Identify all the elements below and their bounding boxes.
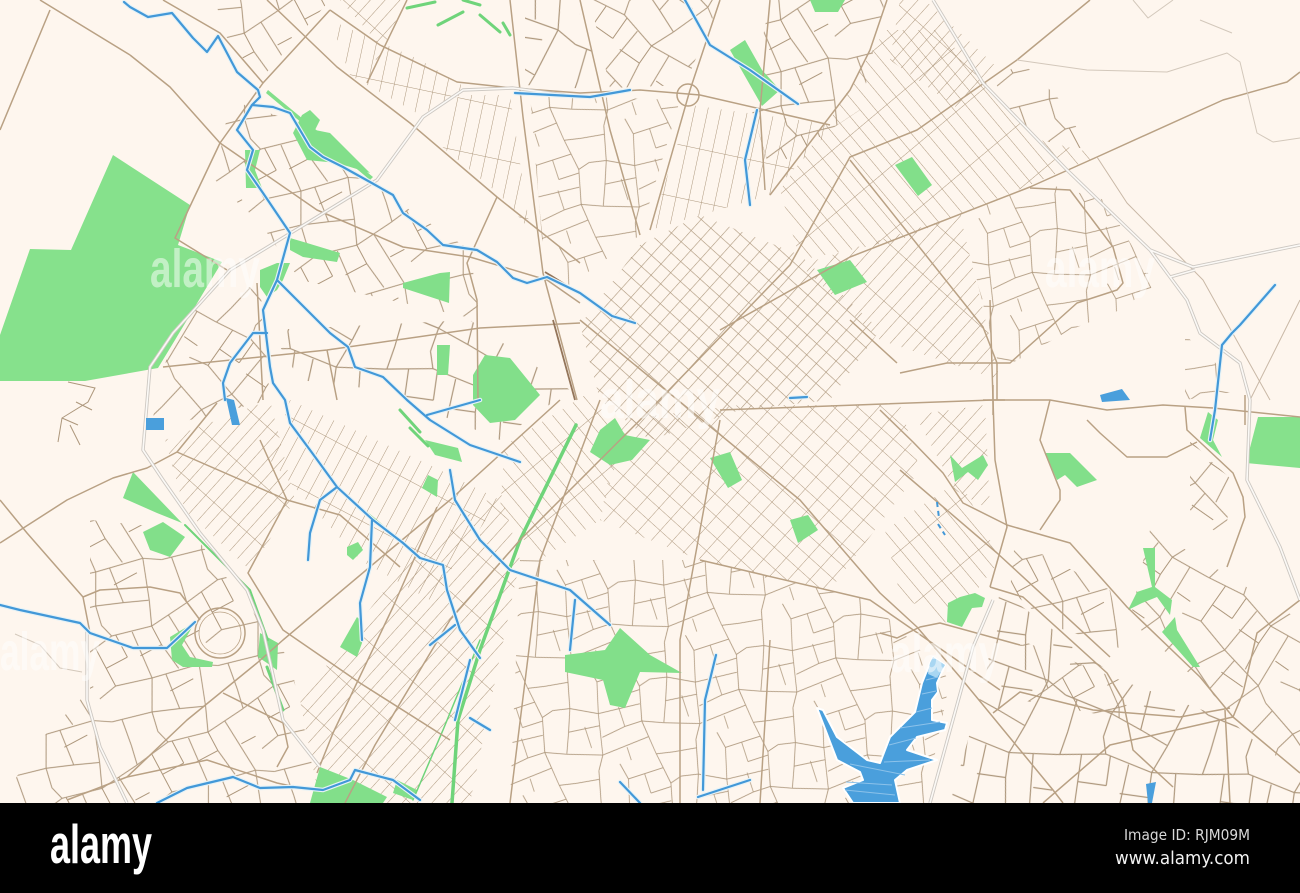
- logo: alamy: [50, 813, 152, 875]
- watermark: alamy: [1045, 239, 1155, 299]
- watermark: [0, 239, 1155, 684]
- green corridors: [185, 0, 576, 803]
- park: eastern edge: [1246, 417, 1300, 468]
- parks: scattered green spaces: [123, 0, 1222, 803]
- watermark: alamy: [150, 239, 260, 299]
- park: large western reserve: [0, 155, 222, 381]
- rail line: [544, 271, 576, 400]
- small ponds: [146, 389, 1156, 803]
- website: www.alamy.com: [1115, 848, 1250, 869]
- watermark: alamy: [0, 622, 100, 682]
- isolated western street cluster: [58, 382, 95, 445]
- image id: Image ID: RJM09M: [1124, 826, 1250, 844]
- watermark: alamy: [600, 370, 720, 430]
- footer bar: [0, 803, 1300, 893]
- lake: [817, 657, 947, 803]
- watermark: alamy: [890, 624, 1000, 684]
